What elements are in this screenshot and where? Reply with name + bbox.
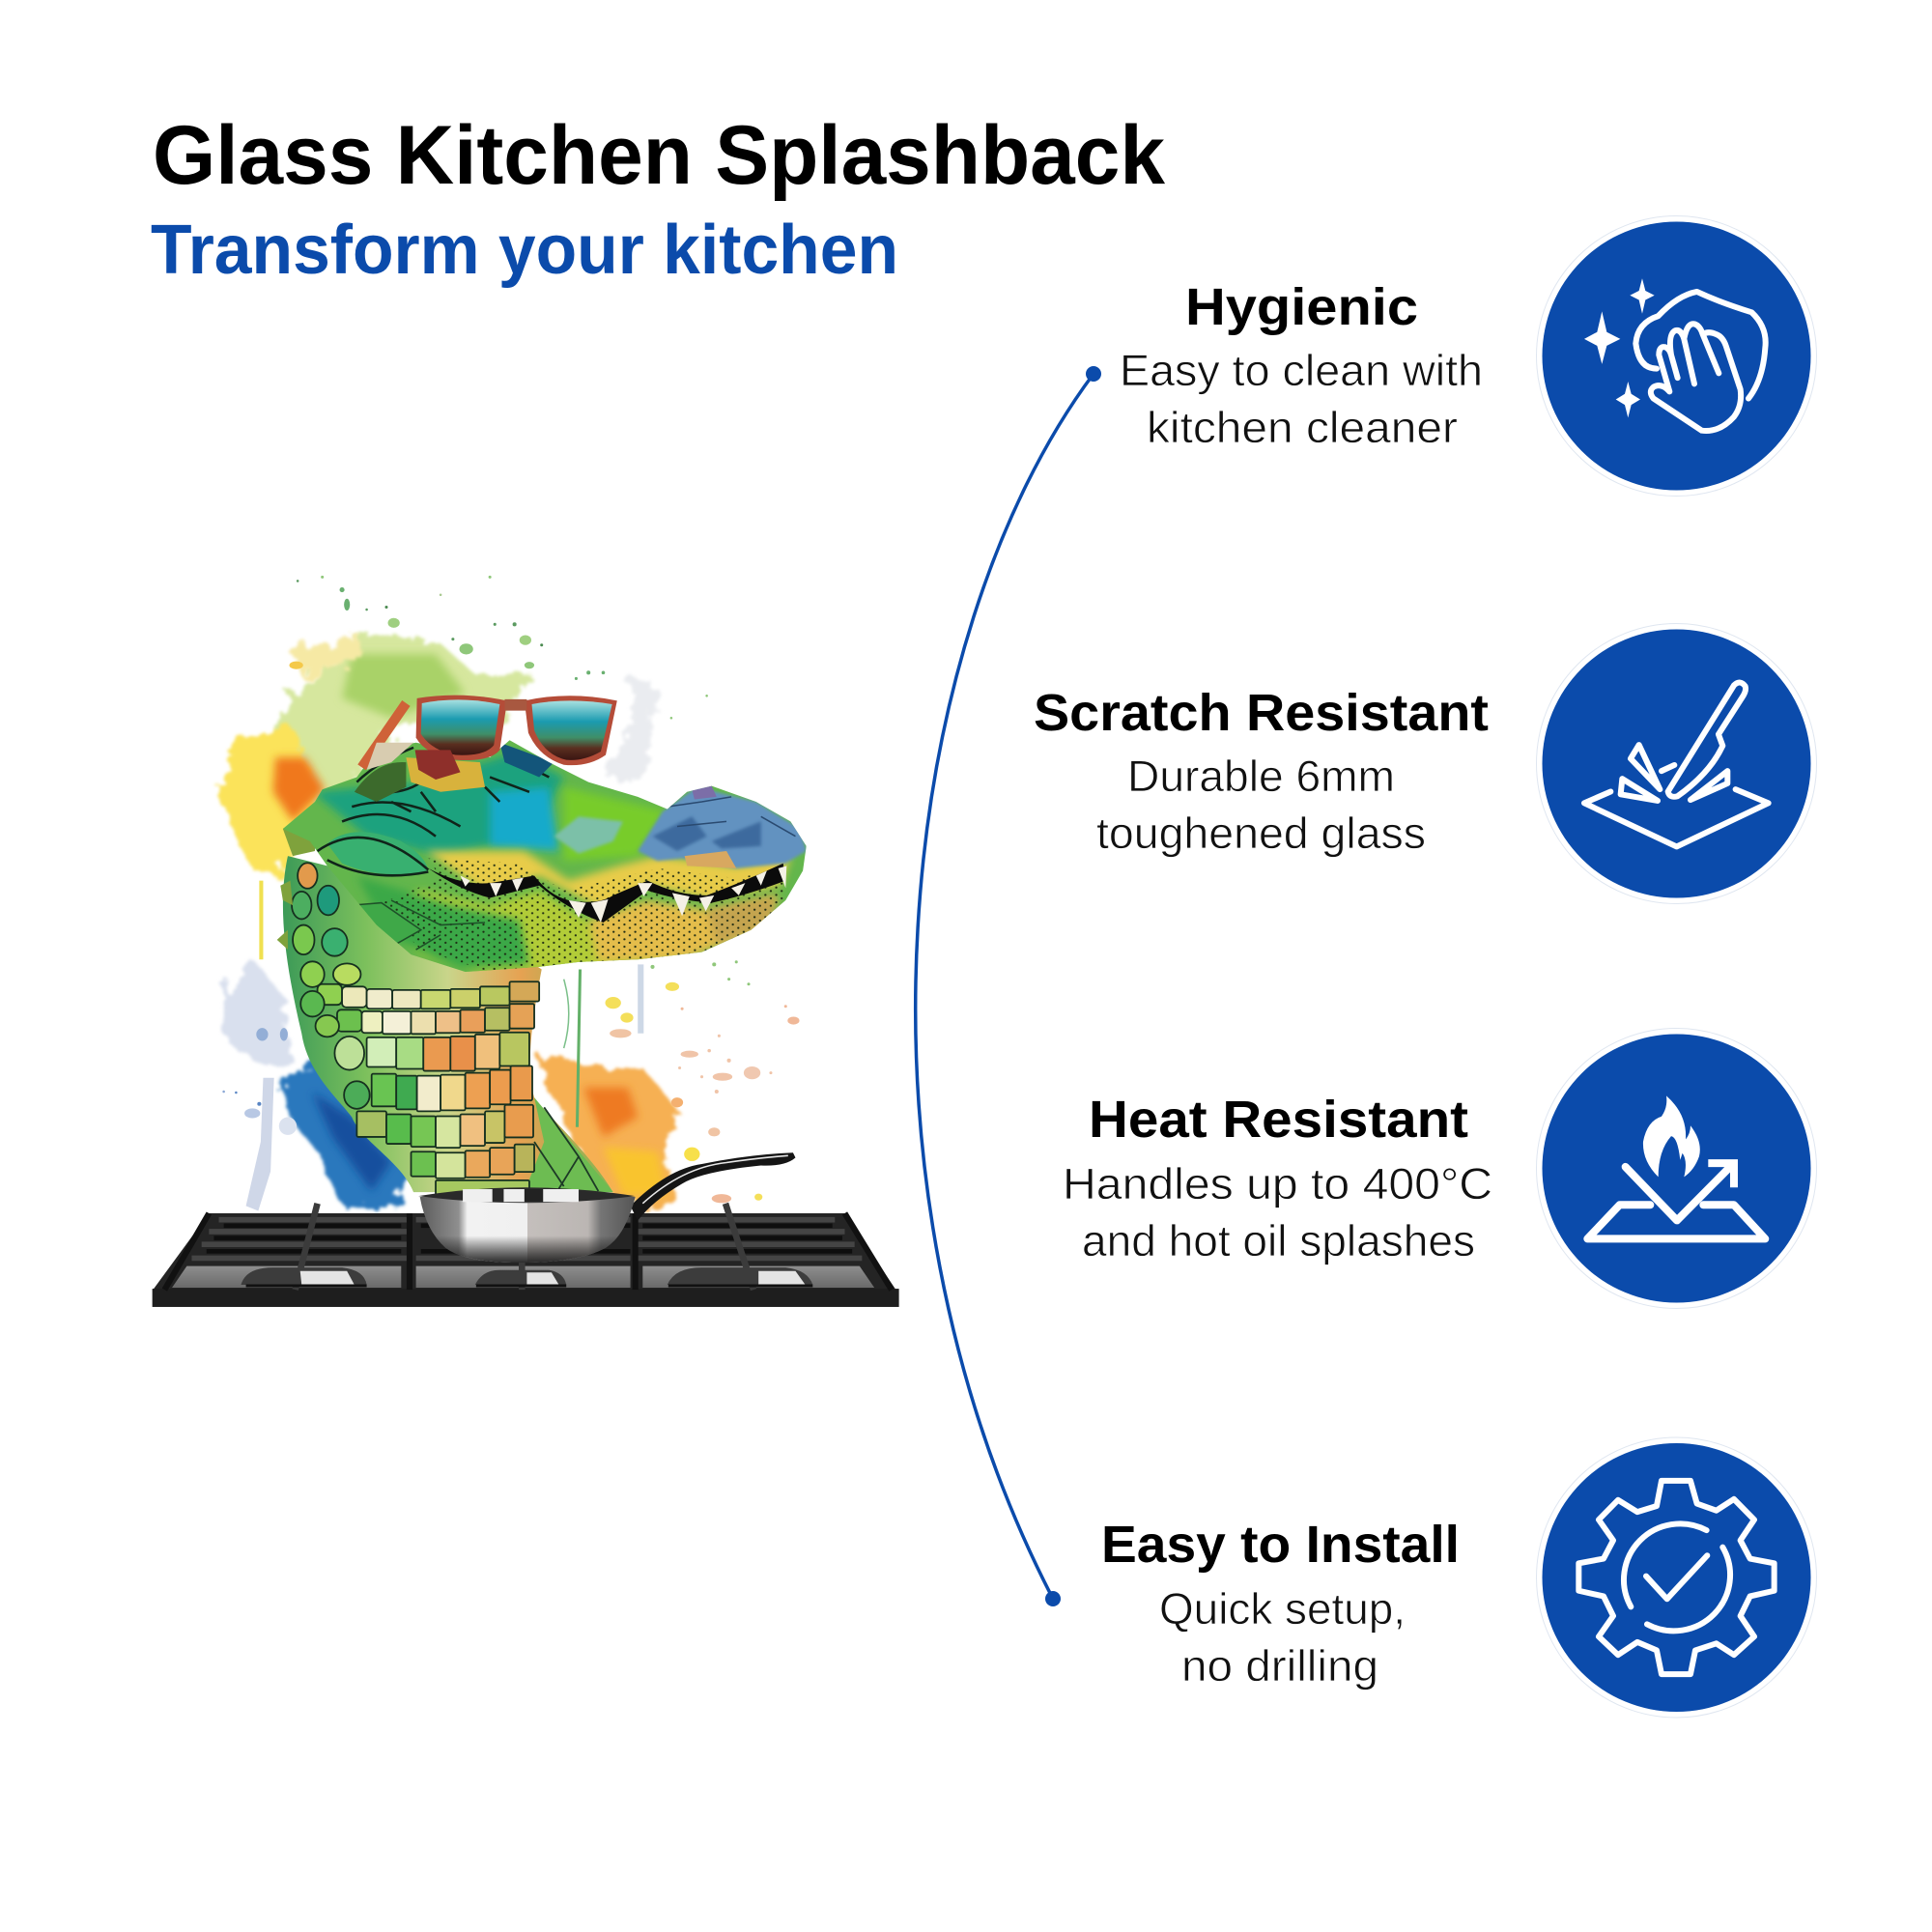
paint splashes xyxy=(219,635,682,1210)
feature text: Heat Resistant: and hot oil splashes xyxy=(1082,1216,1475,1265)
burners xyxy=(241,1267,812,1286)
infographic canvas xyxy=(151,124,1817,1718)
paint droplets xyxy=(222,576,800,1203)
product illustration: crocodile splashback above hob xyxy=(153,576,899,1307)
sunglasses xyxy=(361,696,617,780)
feature text: Heat Resistant xyxy=(1063,1091,1492,1265)
feature text: Scratch Resistant: toughened glass xyxy=(1096,809,1426,858)
croc mouth and teeth xyxy=(428,864,785,923)
croc cheek and eye folds xyxy=(327,832,428,874)
gas hob xyxy=(153,1204,899,1307)
feature text: Scratch Resistant: Scratch Resistant xyxy=(1034,684,1489,742)
crocodile head xyxy=(278,738,810,975)
feature text: Hygienic: kitchen cleaner xyxy=(1147,403,1458,452)
feature text: Easy to Install: Easy to Install xyxy=(1101,1516,1460,1574)
connector curve with end dots xyxy=(916,366,1101,1606)
subtitle: Transform your kitchen xyxy=(151,212,898,289)
croc snout xyxy=(638,787,807,868)
title: Glass Kitchen Splashback xyxy=(153,109,1165,202)
feature text: Hygienic xyxy=(1120,278,1483,452)
icon: knife on glass xyxy=(1536,624,1816,904)
feature text: Scratch Resistant: Durable 6mm xyxy=(1127,752,1395,801)
feature text: Easy to Install: Quick setup, xyxy=(1159,1584,1406,1634)
icon: gear with check mark xyxy=(1536,1437,1816,1718)
feature text: Scratch Resistant xyxy=(1034,684,1489,858)
feature text: Hygienic: Easy to clean with xyxy=(1120,346,1483,395)
icon: cleaning hand xyxy=(1536,216,1816,497)
feature text: Easy to Install xyxy=(1101,1516,1460,1690)
icon: flame and heat deflection xyxy=(1536,1028,1816,1308)
feature text: Heat Resistant: Heat Resistant xyxy=(1089,1091,1468,1149)
crocodile neck with scales xyxy=(277,807,613,1195)
feature text: Heat Resistant: Handles up to 400°C xyxy=(1063,1159,1492,1208)
feature text: Easy to Install: no drilling xyxy=(1181,1641,1378,1690)
feature text: Hygienic: Hygienic xyxy=(1185,278,1418,336)
frying pan xyxy=(418,1152,795,1263)
